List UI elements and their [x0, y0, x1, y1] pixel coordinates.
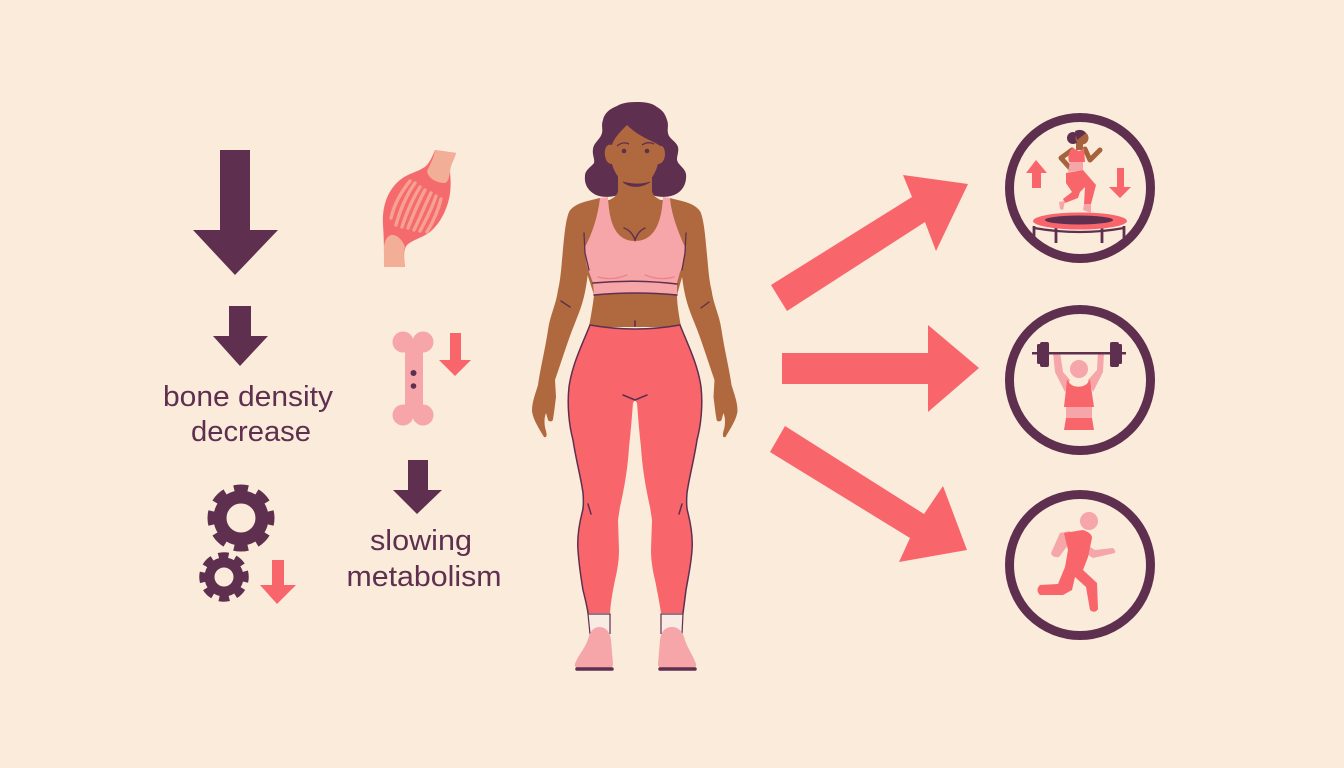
bone pores: [410, 370, 416, 389]
gear down arrow: [260, 560, 296, 604]
small arrow: metabolism down: [393, 460, 442, 514]
sports top: [585, 197, 685, 295]
text: slowing metabolism: slowing: [370, 525, 472, 557]
bone: [392, 332, 434, 426]
socks: [588, 614, 683, 634]
chin shadow: [623, 182, 650, 186]
top details: [561, 228, 709, 326]
left shoe: [575, 627, 613, 668]
small gear: [202, 556, 246, 598]
arrow: up to trampoline: [771, 175, 968, 311]
icon circle: weightlifting: [1010, 310, 1150, 450]
eyes and brows: [617, 143, 654, 153]
neck: [600, 170, 670, 204]
text: bone density decrease: bone density: [163, 381, 334, 413]
shoe soles: [577, 667, 695, 671]
right arm: [670, 198, 738, 437]
large arrow: decline: [193, 150, 278, 275]
muscle fibres: [391, 181, 441, 232]
leggings outlines: [568, 325, 702, 613]
hair: [585, 102, 686, 197]
text: bone density decrease: [163, 381, 334, 448]
leggings: [568, 325, 702, 613]
text: bone density decrease: decrease: [191, 416, 311, 448]
icon circle: running: [1010, 494, 1150, 636]
central figure: woman: [532, 102, 738, 669]
icon: bone with down arrow: [392, 332, 471, 426]
arrow: down to running: [770, 426, 967, 562]
top tendon: [427, 150, 456, 183]
bottom tendon: [384, 235, 405, 267]
icon: muscle: [383, 150, 456, 267]
barbell: [1032, 342, 1126, 367]
lifter torso: [1064, 380, 1094, 407]
icon circle: trampoline exercise: [1010, 118, 1150, 258]
jumping person: [1059, 130, 1100, 213]
down arrow: [1109, 168, 1131, 198]
icon: gears with down arrow: [202, 488, 296, 604]
arrow: across to strength: [782, 325, 979, 412]
up arrow: [1026, 160, 1047, 188]
right shoe: [658, 627, 696, 668]
runner arms: [1051, 531, 1115, 558]
face: [605, 125, 665, 186]
lifter head: [1070, 360, 1088, 378]
torso: [586, 200, 684, 327]
small arrow: bone density down: [213, 306, 268, 366]
lifter arms: [1053, 352, 1104, 392]
left arm: [532, 198, 600, 437]
runner torso and legs: [1038, 530, 1098, 612]
text: slowing metabolism: metabolism: [346, 561, 502, 593]
bone arrow: [439, 333, 471, 376]
trampoline: [1033, 212, 1127, 243]
runner head: [1080, 512, 1098, 530]
text: slowing metabolism: [346, 525, 502, 593]
large gear: [212, 488, 270, 548]
